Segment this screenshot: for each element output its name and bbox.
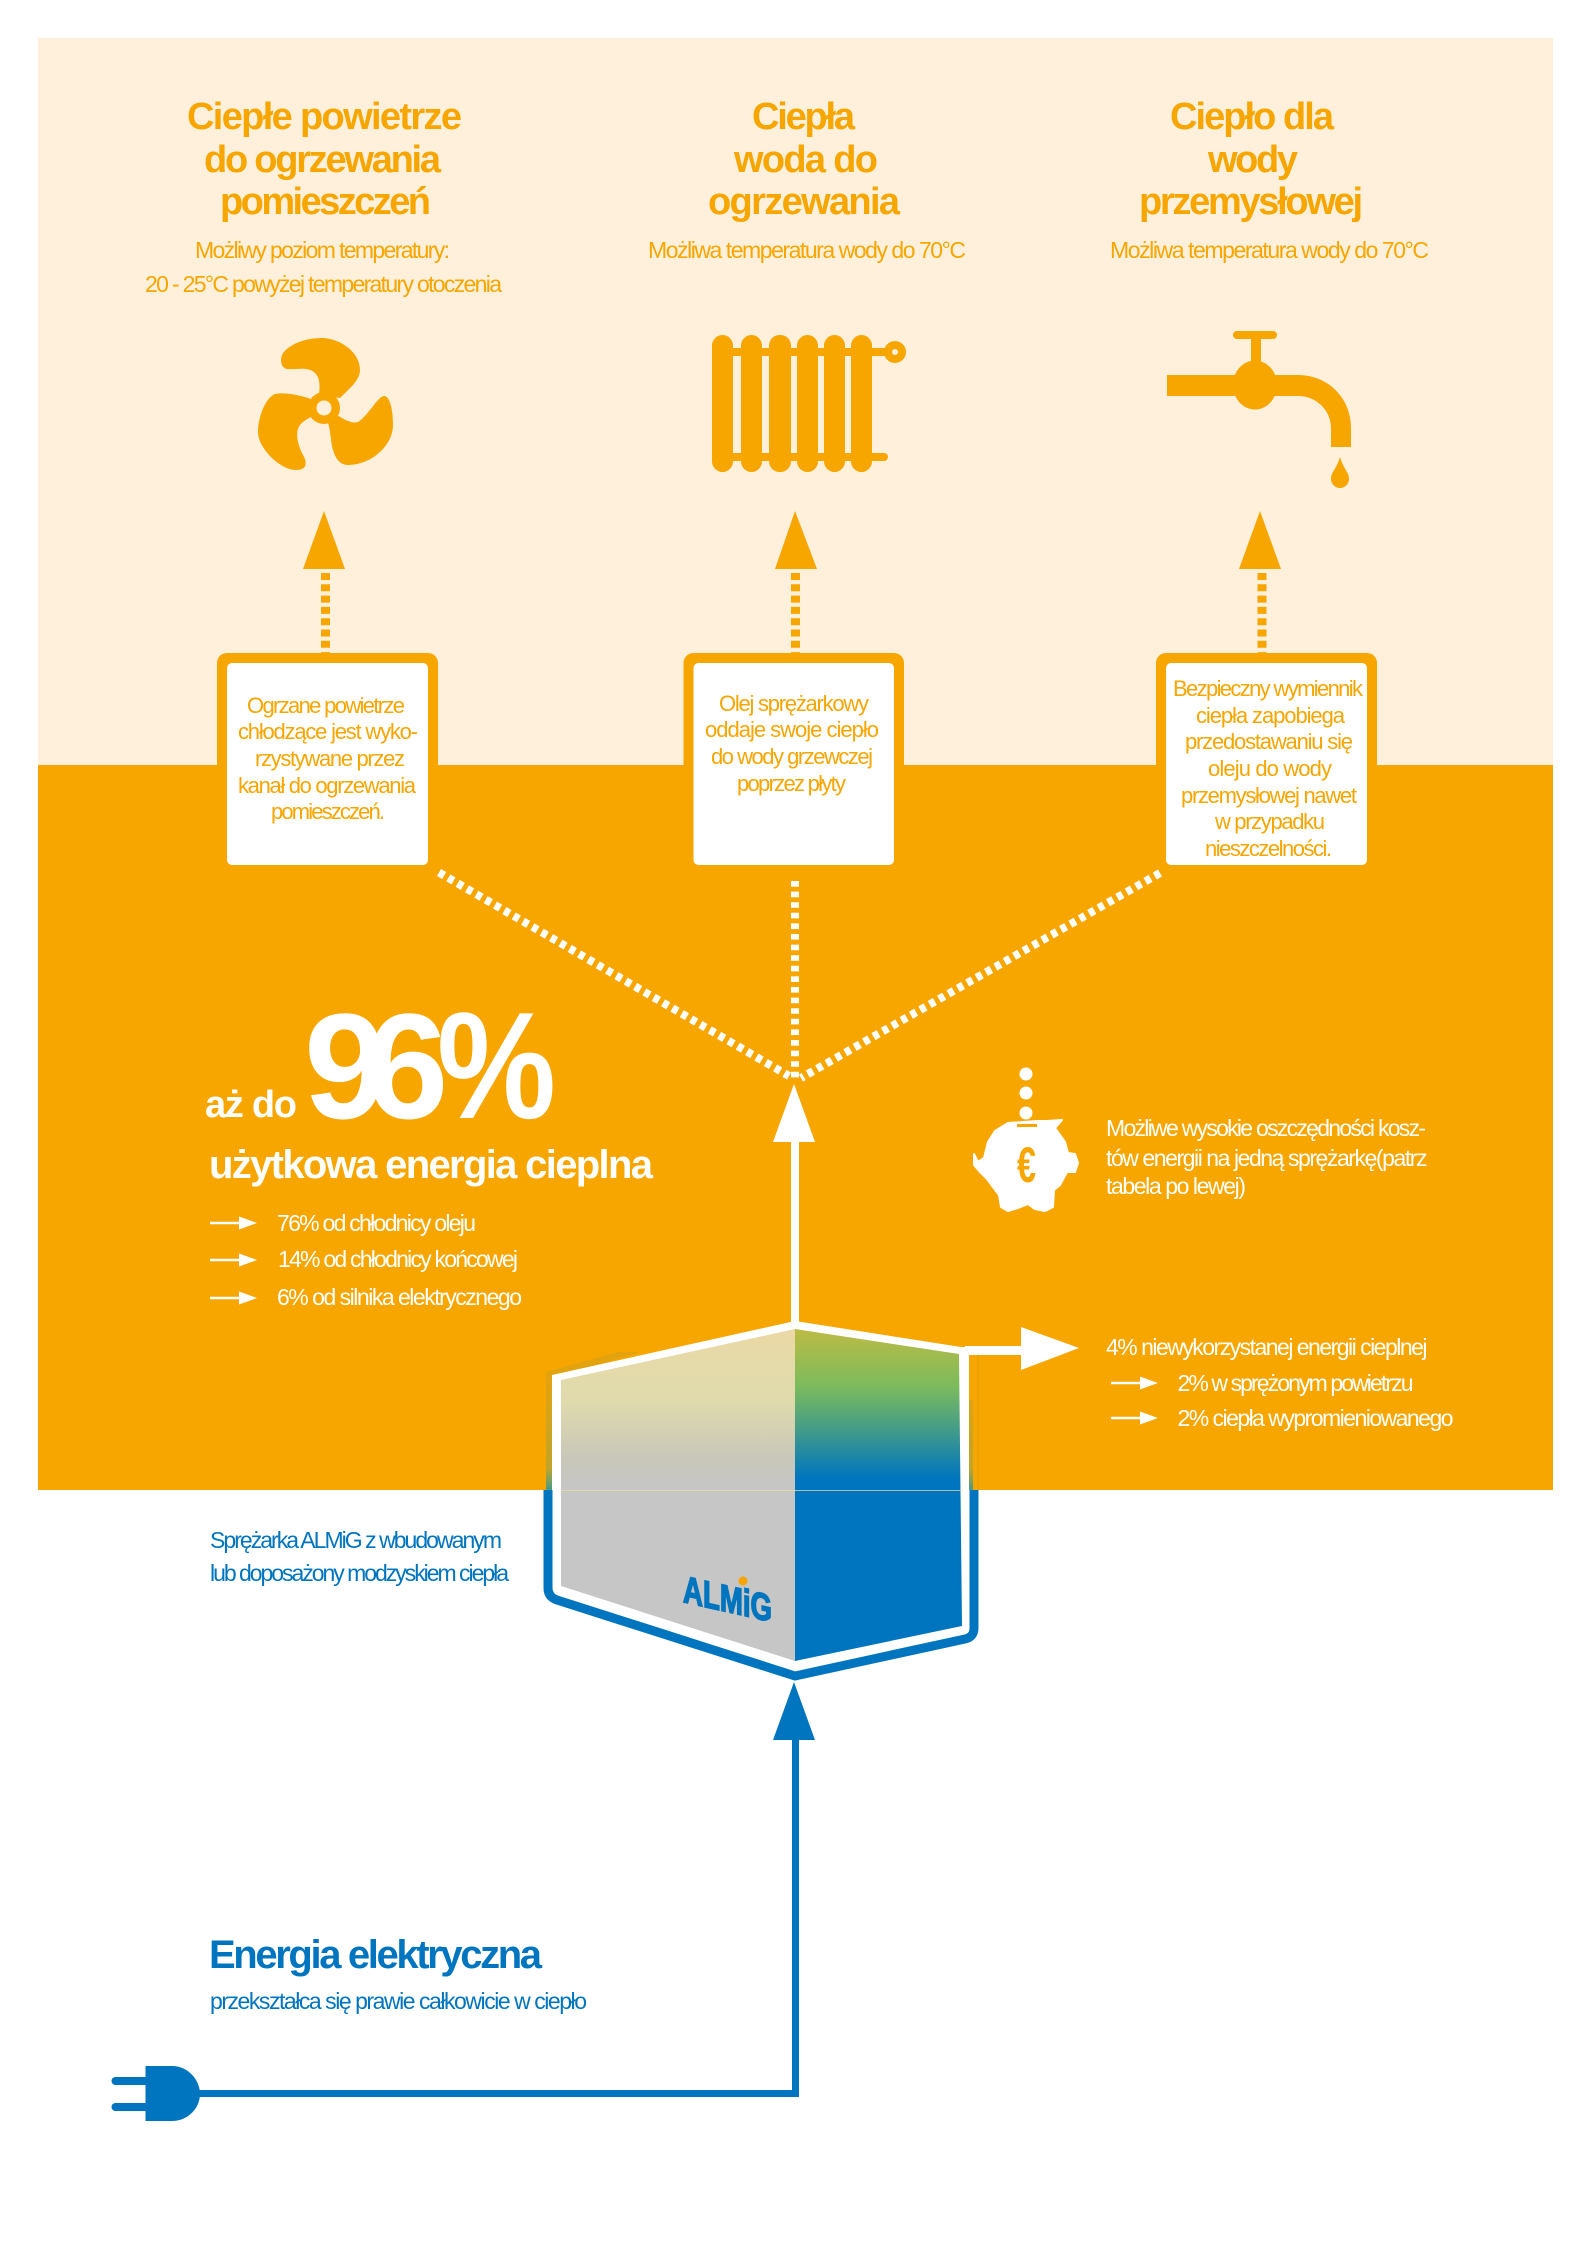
text: possible cost savings: Możliwe wysokie oszczędności kosz- (1106, 1115, 1426, 1141)
text: compressor description (210, 1527, 509, 1586)
box: heated cooling air: chłodzące jest wyko- (238, 719, 418, 744)
cube left grey face (561, 1329, 795, 1661)
icon: piggy bank with euro (974, 1068, 1078, 1211)
box: heated cooling air: Ogrzane powietrze (247, 693, 405, 718)
arrow: white heat flow up from compressor (773, 1084, 815, 1325)
box: safe heat exchanger: w przypadku (1214, 809, 1325, 834)
icon: fan (258, 338, 393, 470)
arrow: white loss arrow to the right (965, 1327, 1079, 1370)
arrow: up from box to tap (1239, 511, 1281, 655)
box: heated cooling air: pomieszczeń. (271, 799, 385, 824)
box: heated cooling air: rzystywane przez (255, 746, 405, 771)
box: safe heat exchanger: Bezpieczny wymiennik (1173, 676, 1364, 701)
box: compressor oil: Olej sprężarkowy (719, 691, 869, 716)
panel: cream upper background (38, 38, 1553, 766)
heading: hot water: Ciepła (752, 96, 856, 138)
cube edge fade on orange (546, 1352, 640, 1490)
box: compressor oil: poprzez płyty (737, 771, 846, 796)
list: usable heat sources: 6% od silnika elektrycznego (277, 1284, 522, 1310)
arrow: bullet electric motor (210, 1292, 257, 1304)
heading: warm air (187, 96, 462, 223)
text: possible process water temperature: Możliwa temperatura wody do 70°C (1110, 237, 1429, 263)
text: up to 96 percent usable heat: użytkowa energia cieplna (209, 1143, 654, 1187)
cube outer blue frame (548, 1490, 974, 1676)
icon: radiator (712, 335, 906, 472)
arrow: blue electricity line into compressor (195, 1682, 815, 2097)
arrow: bullet compressed air (1111, 1376, 1158, 1390)
text: electricity converted to heat: przekształca się prawie całkowicie w ciepło (210, 1988, 587, 2014)
arrow: up from box to fan (303, 511, 345, 655)
text: possible cost savings: tabela po lewej) (1106, 1173, 1246, 1199)
icon: piggy bank with euro: € (1017, 1137, 1036, 1193)
box: compressor oil: oddaje swoje ciepło (705, 717, 879, 742)
text: possible water temperature: Możliwa temperatura wody do 70°C (648, 237, 966, 263)
box: safe heat exchanger: nieszczelności. (1205, 836, 1332, 861)
list: usable heat sources: 76% od chłodnicy oleju (277, 1210, 476, 1236)
text: possible cost savings: tów energii na jedną sprężarkę(patrz (1106, 1145, 1428, 1171)
heading: process water (1139, 96, 1363, 223)
heading: process water: Ciepło dla (1170, 96, 1335, 138)
cube right blue-green face (795, 1329, 962, 1661)
box: heated cooling air: kanał do ogrzewania (238, 773, 417, 798)
text: possible temperature level: Możliwy poziom temperatury: (195, 237, 450, 263)
heading: hot water (708, 96, 901, 223)
column: heat for process water (1110, 96, 1429, 875)
box: safe heat exchanger (1156, 653, 1377, 875)
text: possible temperature level: 20 - 25°C powyżej temperatury otoczenia (145, 271, 502, 297)
text: up to 96 percent usable heat: aż do (205, 1084, 297, 1126)
heading: electrical energy: Energia elektryczna (209, 1933, 543, 1977)
heading: warm air: Ciepłe powietrze (187, 96, 462, 138)
box: heated cooling air (217, 653, 438, 875)
cube white outline (552, 1321, 969, 1490)
compressor cube (546, 1321, 978, 1676)
arrow: up from box to radiator (775, 511, 817, 655)
text: unused heat energy: 2% ciepła wypromieniowanego (1178, 1405, 1454, 1431)
column: hot water for heating (648, 96, 966, 875)
text: up to 96 percent usable heat: 96 (304, 982, 448, 1150)
heading: warm air: do ogrzewania (204, 139, 442, 181)
heading: process water: wody (1207, 139, 1298, 181)
box: safe heat exchanger: przemysłowej nawet (1181, 783, 1357, 808)
text: possible cost savings (1106, 1115, 1428, 1199)
logo: ALMiG: ALMiG (683, 1568, 772, 1631)
text: unused heat energy: 2% w sprężonym powietrzu (1178, 1370, 1414, 1396)
box: compressor oil: do wody grzewczej (711, 744, 873, 769)
box: safe heat exchanger: oleju do wody (1208, 756, 1332, 781)
arrow: bullet radiated heat (1111, 1412, 1158, 1424)
box: safe heat exchanger: ciepła zapobiega (1196, 703, 1346, 728)
text: up to 96 percent usable heat (205, 981, 654, 1187)
icon: power plug (112, 2066, 200, 2121)
heading: process water: przemysłowej (1139, 181, 1363, 223)
text: compressor description: Sprężarka ALMiG z wbudowanym (210, 1527, 502, 1553)
list: usable heat sources: 14% od chłodnicy końcowej (278, 1246, 518, 1272)
box: safe heat exchanger: przedostawaniu się (1185, 729, 1353, 754)
logo: ALMiG (683, 1568, 772, 1631)
arrow: bullet oil cooler (210, 1216, 257, 1230)
panel: orange lower background (38, 765, 1553, 1490)
list: usable heat sources (210, 1210, 522, 1310)
box: compressor oil (684, 653, 904, 875)
icon: water tap (1167, 331, 1351, 488)
text: unused heat energy: 4% niewykorzystanej energii cieplnej (1106, 1334, 1428, 1360)
text: unused heat energy (1106, 1334, 1454, 1431)
column: warm air for space heating (145, 96, 502, 875)
text: possible temperature level (145, 237, 502, 297)
heading: hot water: woda do (733, 139, 878, 181)
dotted connector lines to the boxes (439, 872, 1160, 1078)
arrow: bullet aftercooler (210, 1254, 257, 1266)
heading: hot water: ogrzewania (708, 181, 901, 223)
heading: warm air: pomieszczeń (220, 181, 431, 223)
text: compressor description: lub doposażony modzyskiem ciepła (210, 1560, 509, 1586)
text: up to 96 percent usable heat: % (437, 981, 556, 1151)
